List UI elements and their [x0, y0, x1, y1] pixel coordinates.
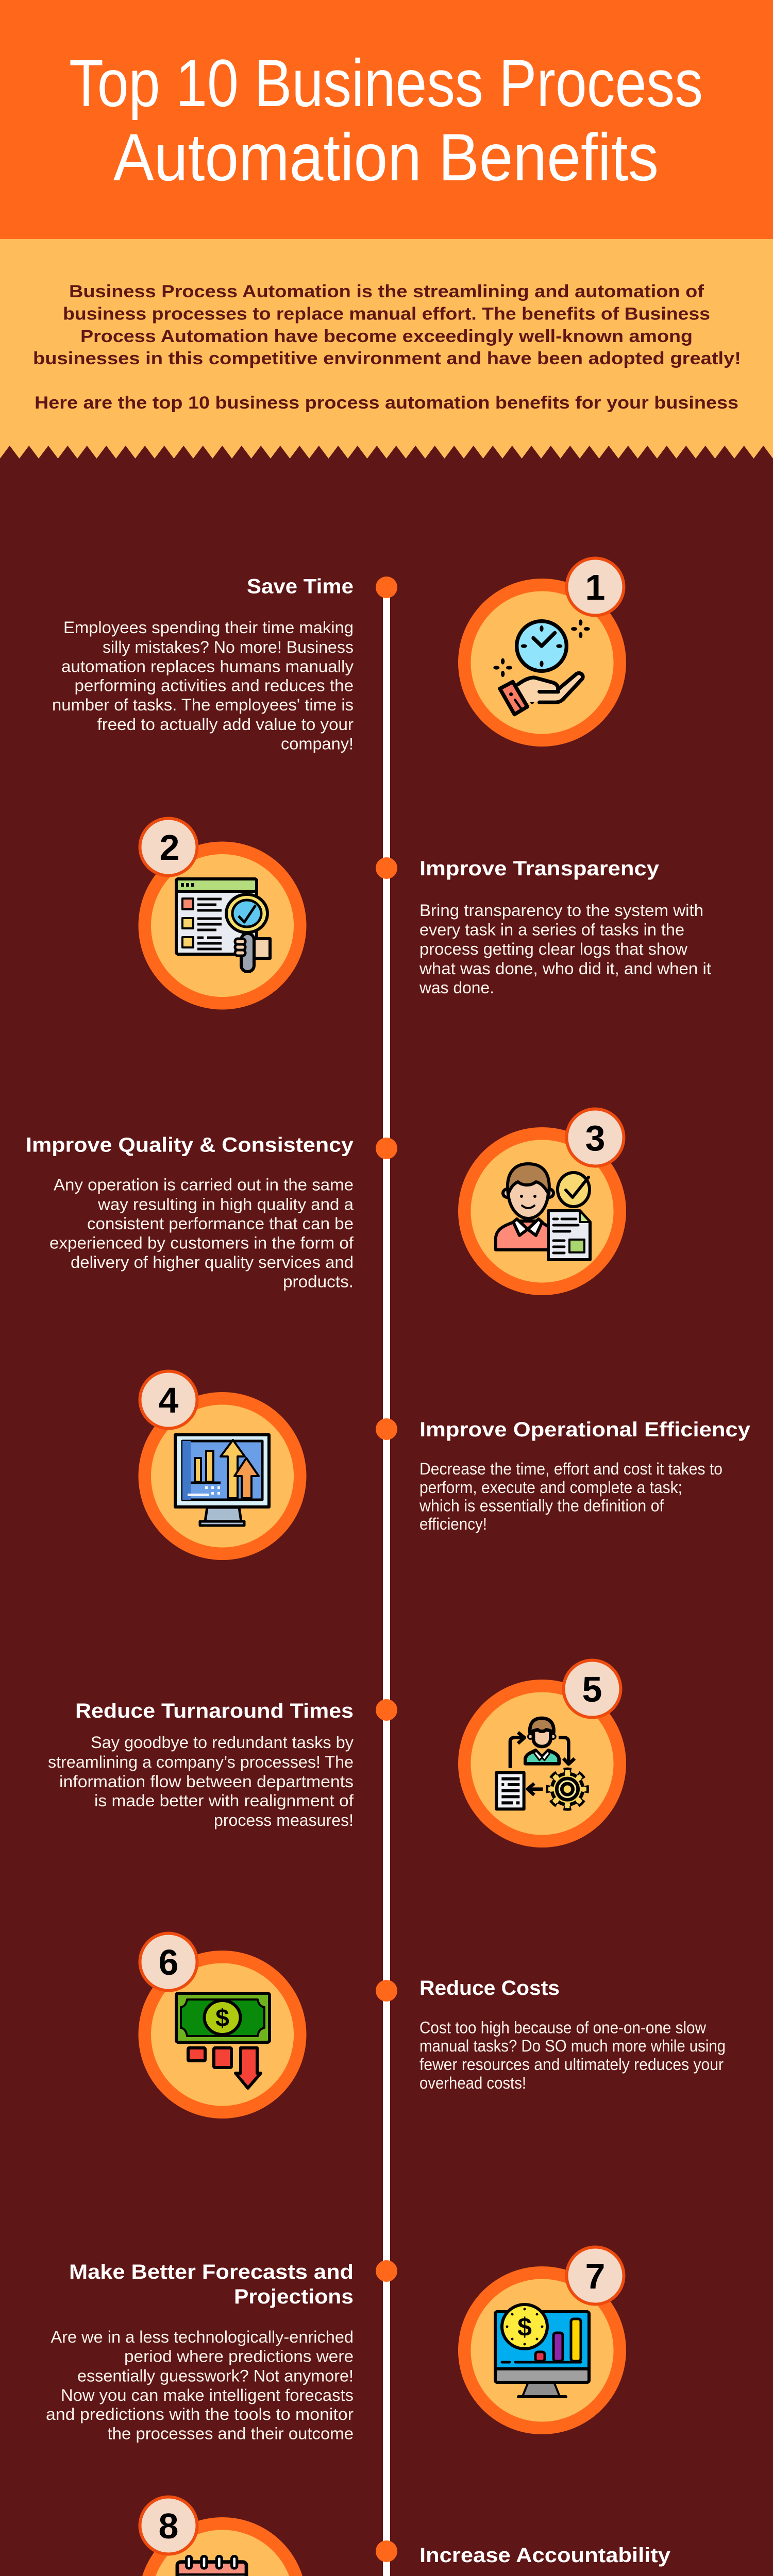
body text 2 [419, 901, 711, 997]
icon circle 3 [458, 1109, 626, 1295]
body text 1: company! [281, 735, 354, 753]
body text 1: number of tasks. The employees' time is [52, 696, 354, 714]
body text 5: streamlining a company’s processes! The [48, 1753, 354, 1771]
panel: benefit 1 [52, 558, 626, 753]
body text 1: automation replaces humans manually [61, 657, 354, 676]
intro text: businesses in this competitive environment and have been adopted greatly! [33, 349, 741, 368]
heading 6: Reduce Costs [419, 1977, 560, 1999]
heading 7 [69, 2261, 354, 2308]
icon: calendar, dollar gear and bars [177, 2556, 269, 2576]
timeline dot 8 [376, 2540, 397, 2562]
icon: employee with document [496, 1164, 590, 1260]
intro text: Business Process Automation is the streamlining and automation of [69, 282, 704, 301]
body text 3: delivery of higher quality services and [71, 1253, 354, 1272]
body text 7: Are we in a less technologically-enriched [51, 2328, 354, 2346]
icon: report under magnifier [176, 879, 270, 972]
icon: monitor with growth arrows [175, 1435, 269, 1526]
panel: benefit 6 [138, 1933, 726, 2119]
body text 7: essentially guesswork? Not anymore! [77, 2367, 354, 2385]
body text 4: Decrease the time, effort and cost it takes to [419, 1460, 722, 1478]
header band [0, 0, 773, 239]
number badge 1 [567, 558, 624, 615]
body text 4: efficiency! [419, 1515, 487, 1533]
icon: process cycle with person, gear and document [496, 1718, 586, 1809]
body text 6: overhead costs! [419, 2074, 526, 2092]
timeline dot 5 [376, 1699, 397, 1721]
heading 2: Improve Transparency [419, 857, 660, 880]
number badge 1: 1 [585, 567, 605, 607]
body text 3: Any operation is carried out in the same [54, 1176, 354, 1194]
timeline line [383, 587, 390, 2576]
number badge 8: 8 [159, 2506, 178, 2546]
title [69, 45, 703, 195]
number badge 5: 5 [582, 1669, 602, 1709]
body text 2: every task in a series of tasks in the [419, 920, 684, 939]
timeline dot 1 [376, 577, 397, 598]
body text 6: fewer resources and ultimately reduces your [419, 2055, 724, 2074]
panel: benefit 3 [26, 1109, 626, 1295]
number badge 5 [564, 1660, 620, 1718]
number badge 4 [140, 1371, 197, 1428]
body text 2: process getting clear logs that show [419, 940, 688, 958]
heading 7: Make Better Forecasts and [69, 2261, 354, 2283]
icon circle 7 [458, 2247, 626, 2434]
number badge 3 [567, 1109, 624, 1166]
icon: clock in hand [493, 619, 590, 715]
intro panel [0, 239, 773, 459]
body text 6: Cost too high because of one-on-one slow [419, 2019, 707, 2037]
intro text [33, 282, 741, 413]
body text 7 [46, 2328, 354, 2443]
icon circle 8 [138, 2497, 306, 2576]
body text 7: period where predictions were [124, 2347, 354, 2365]
body text 3 [49, 1176, 354, 1291]
body text 4: perform, execute and complete a task; [419, 1478, 682, 1497]
number badge 6 [140, 1933, 197, 1991]
body text 2: what was done, who did it, and when it [419, 959, 711, 978]
heading 5: Reduce Turnaround Times [75, 1700, 354, 1722]
body text 7: the processes and their outcome [107, 2424, 354, 2443]
body text 5: Say goodbye to redundant tasks by [91, 1733, 354, 1752]
icon circle 2 [138, 818, 306, 1010]
icon: banknote with falling cost [176, 1993, 270, 2088]
panel: benefit 4 [138, 1371, 751, 1560]
heading 8: Increase Accountability [419, 2544, 671, 2567]
body text 3: products. [283, 1273, 354, 1291]
body text 6 [419, 2019, 726, 2092]
body text 5: is made better with realignment of [94, 1791, 354, 1810]
timeline dot 7 [376, 2260, 397, 2282]
body text 5: information flow between departments [59, 1772, 354, 1791]
icon circle 6 [138, 1933, 306, 2119]
number badge 2 [140, 818, 197, 876]
number badge 4: 4 [159, 1380, 179, 1420]
timeline dot 2 [376, 857, 397, 879]
number badge 3: 3 [585, 1118, 605, 1158]
number badge 2: 2 [160, 827, 179, 868]
body text 5 [48, 1733, 354, 1829]
number badge 7 [567, 2247, 624, 2304]
body text 1: silly mistakes? No more! Business [103, 638, 354, 656]
body text 3: experienced by customers in the form of [49, 1233, 354, 1252]
body text 7: and predictions with the tools to monitor [46, 2405, 354, 2424]
icon circle 4 [138, 1371, 306, 1560]
panel: benefit 7 [46, 2247, 626, 2443]
body text 2: was done. [419, 978, 494, 997]
zigzag edge [0, 446, 773, 459]
body text 2: Bring transparency to the system with [419, 901, 703, 920]
timeline dot 4 [376, 1418, 397, 1440]
icon circle 1 [458, 558, 626, 747]
number badge 7: 7 [585, 2256, 605, 2296]
body text 1 [52, 618, 354, 753]
intro text: Here are the top 10 business process automation benefits for your business [35, 393, 738, 413]
timeline dot 6 [376, 1980, 397, 2002]
body text 3: consistent performance that can be [87, 1214, 354, 1233]
intro text: Process Automation have become exceedingly well-known among [80, 327, 693, 346]
heading 4: Improve Operational Efficiency [419, 1418, 751, 1441]
body text 4: which is essentially the definition of [419, 1496, 664, 1515]
number badge 8 [140, 2497, 197, 2554]
body text 1: performing activities and reduces the [74, 676, 354, 695]
icon: monitor with dollar chart: $ [517, 2313, 532, 2342]
title: Automation Benefits [113, 120, 659, 195]
body text 4 [419, 1460, 722, 1533]
panel: benefit 5 [48, 1660, 626, 1848]
heading 1: Save Time [247, 575, 354, 598]
intro text: business processes to replace manual effort. The benefits of Business [63, 304, 710, 324]
body text 1: freed to actually add value to your [97, 715, 354, 734]
heading 3: Improve Quality & Consistency [26, 1133, 354, 1156]
number badge 6: 6 [159, 1942, 178, 1982]
body text 5: process measures! [214, 1811, 354, 1829]
icon: banknote with falling cost: $ [215, 2005, 229, 2032]
icon: monitor with dollar chart [495, 2304, 589, 2397]
body text 3: way resulting in high quality and a [97, 1195, 354, 1214]
panel: benefit 8 [138, 2497, 726, 2576]
body text 6: manual tasks? Do SO much more while using [419, 2037, 726, 2055]
timeline dot 3 [376, 1138, 397, 1159]
heading 7: Projections [234, 2285, 354, 2308]
body text 7: Now you can make intelligent forecasts [61, 2386, 354, 2404]
icon circle 5 [458, 1660, 626, 1848]
panel: benefit 2 [138, 818, 711, 1010]
body text 1: Employees spending their time making [63, 618, 354, 637]
